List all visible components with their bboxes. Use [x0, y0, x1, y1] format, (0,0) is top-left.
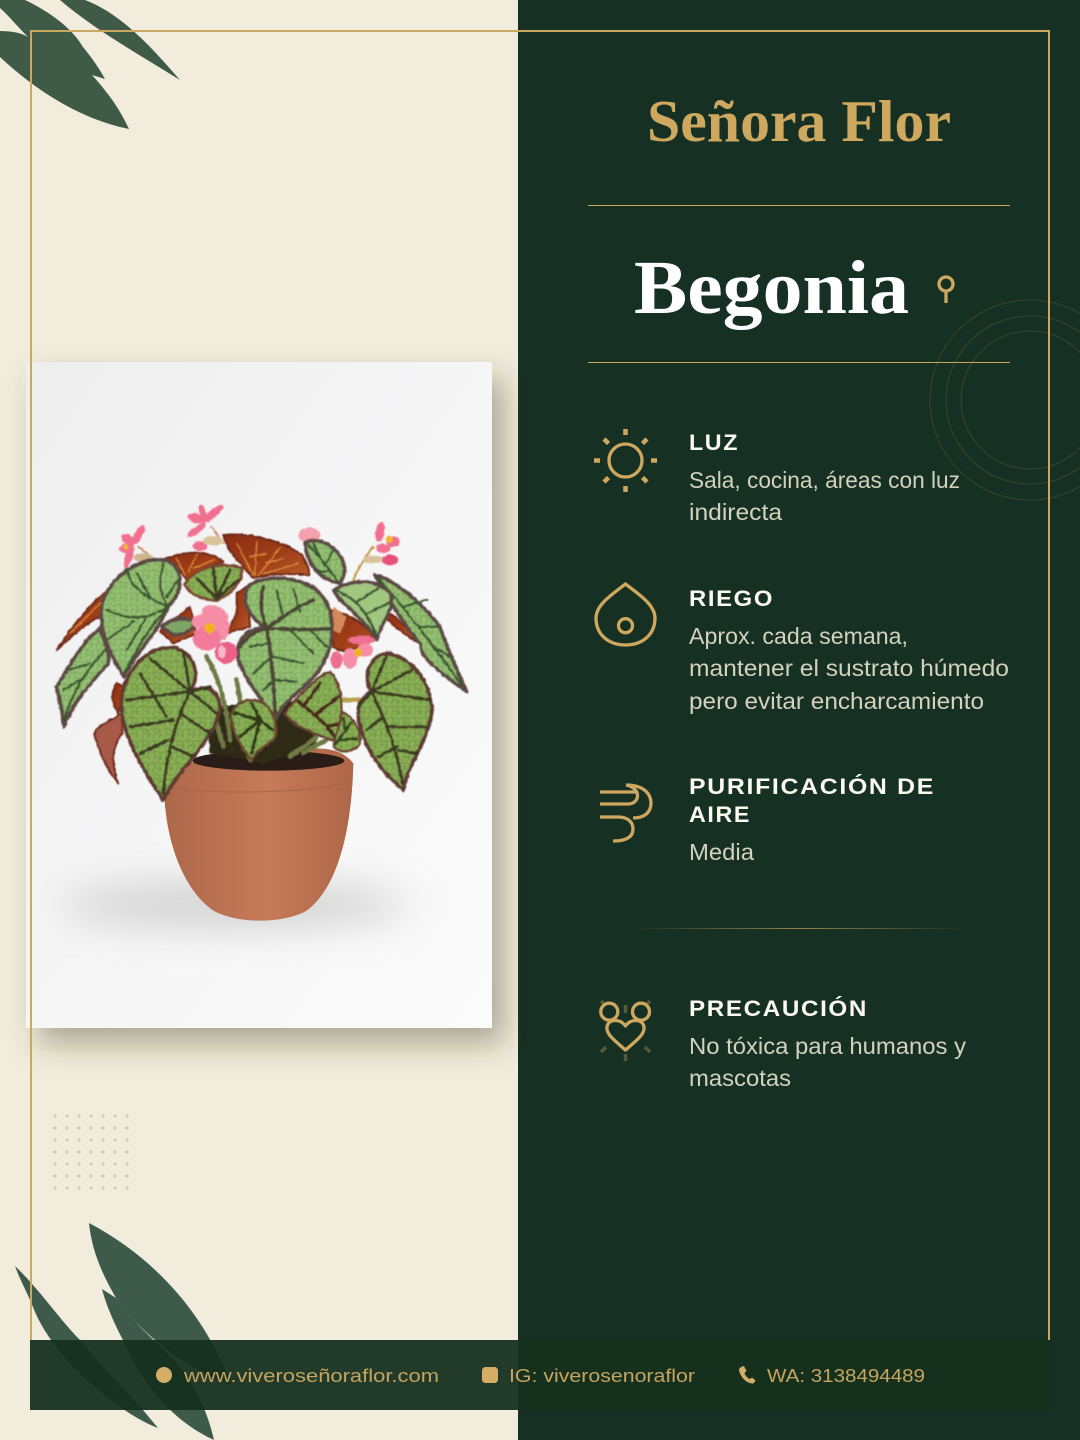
text luz — [689, 467, 960, 525]
small leaf behind flower — [162, 618, 193, 635]
small leaf right of pot — [333, 712, 360, 751]
text precaucion: mascotas — [689, 1065, 791, 1091]
text riego: pero evitar encharcamiento — [689, 688, 984, 714]
section: luz — [594, 429, 960, 525]
brand title: Señora Flor — [647, 88, 951, 154]
icon: wind — [600, 785, 651, 841]
decorative leaves: bottom left — [15, 1223, 231, 1440]
instagram handle: IG: viverosenoraflor — [509, 1365, 695, 1386]
pink flower center — [191, 601, 237, 664]
label aire: PURIFICACIÓN DE — [689, 774, 935, 799]
text precaucion: No tóxica para humanos y — [689, 1033, 966, 1059]
plant name: Begonia — [634, 246, 909, 330]
reddish tip near flower — [330, 607, 347, 633]
text riego: mantener el sustrato húmedo — [689, 655, 1009, 681]
label luz: LUZ — [689, 430, 739, 455]
icon: web dot — [156, 1367, 172, 1383]
dark centre — [207, 700, 317, 763]
text riego: Aprox. cada semana, — [689, 623, 908, 649]
far right leaf — [375, 575, 467, 692]
small leaf bottom center — [231, 700, 276, 760]
left large leaf — [121, 648, 220, 800]
right dark green panel — [518, 0, 1080, 1440]
text precaucion — [689, 1033, 966, 1091]
text luz: indirecta — [689, 499, 783, 525]
small leaf top center — [185, 565, 242, 600]
leaf right upper — [333, 582, 392, 640]
label precaucion: PRECAUCIÓN — [689, 996, 868, 1021]
plant foliage — [57, 503, 467, 800]
icon: water drop — [596, 584, 655, 645]
leaf top right — [305, 541, 344, 583]
label riego: RIEGO — [689, 586, 774, 611]
icon: sun — [594, 429, 657, 492]
photo shadow — [38, 378, 504, 1044]
decorative dot grid — [49, 1110, 133, 1194]
label aire — [689, 774, 935, 827]
section divider — [630, 928, 970, 929]
icon: phone — [739, 1366, 756, 1384]
header rule bottom — [588, 362, 1010, 363]
decorative leaves: top left — [0, 0, 180, 129]
leaf bottom center right — [285, 672, 342, 742]
concentric decorative circles — [930, 300, 1080, 500]
begonia plant — [57, 503, 467, 921]
section: aire — [600, 774, 935, 865]
text luz: Sala, cocina, áreas con luz — [689, 467, 960, 493]
label aire: AIRE — [689, 802, 751, 827]
leaf upper left — [101, 560, 180, 677]
icon: heart with rings — [601, 1001, 650, 1061]
terracotta pot — [164, 748, 353, 921]
photo backdrop — [26, 362, 492, 1028]
plant photo — [26, 362, 492, 1028]
section: precaucion — [601, 996, 966, 1091]
ground shadow — [60, 883, 410, 927]
pink flower right — [331, 636, 375, 669]
left cream background — [0, 0, 518, 1440]
whatsapp number: WA: 3138494489 — [767, 1365, 925, 1386]
header rule top — [588, 205, 1010, 206]
far left leaf — [57, 628, 109, 727]
right large leaf — [358, 653, 432, 790]
pink flowers back — [119, 503, 400, 570]
text aire: Media — [689, 839, 755, 865]
section: riego — [596, 584, 1009, 714]
footer band — [30, 1340, 1050, 1410]
website: www.viveroseñoraflor.com — [183, 1365, 439, 1386]
back red leaves — [57, 534, 417, 783]
central large leaf — [238, 578, 332, 720]
footer contacts — [156, 1365, 925, 1386]
text riego — [689, 623, 1009, 714]
stems — [138, 527, 373, 760]
icon: small pin — [939, 277, 953, 303]
icon: instagram square — [482, 1367, 498, 1383]
